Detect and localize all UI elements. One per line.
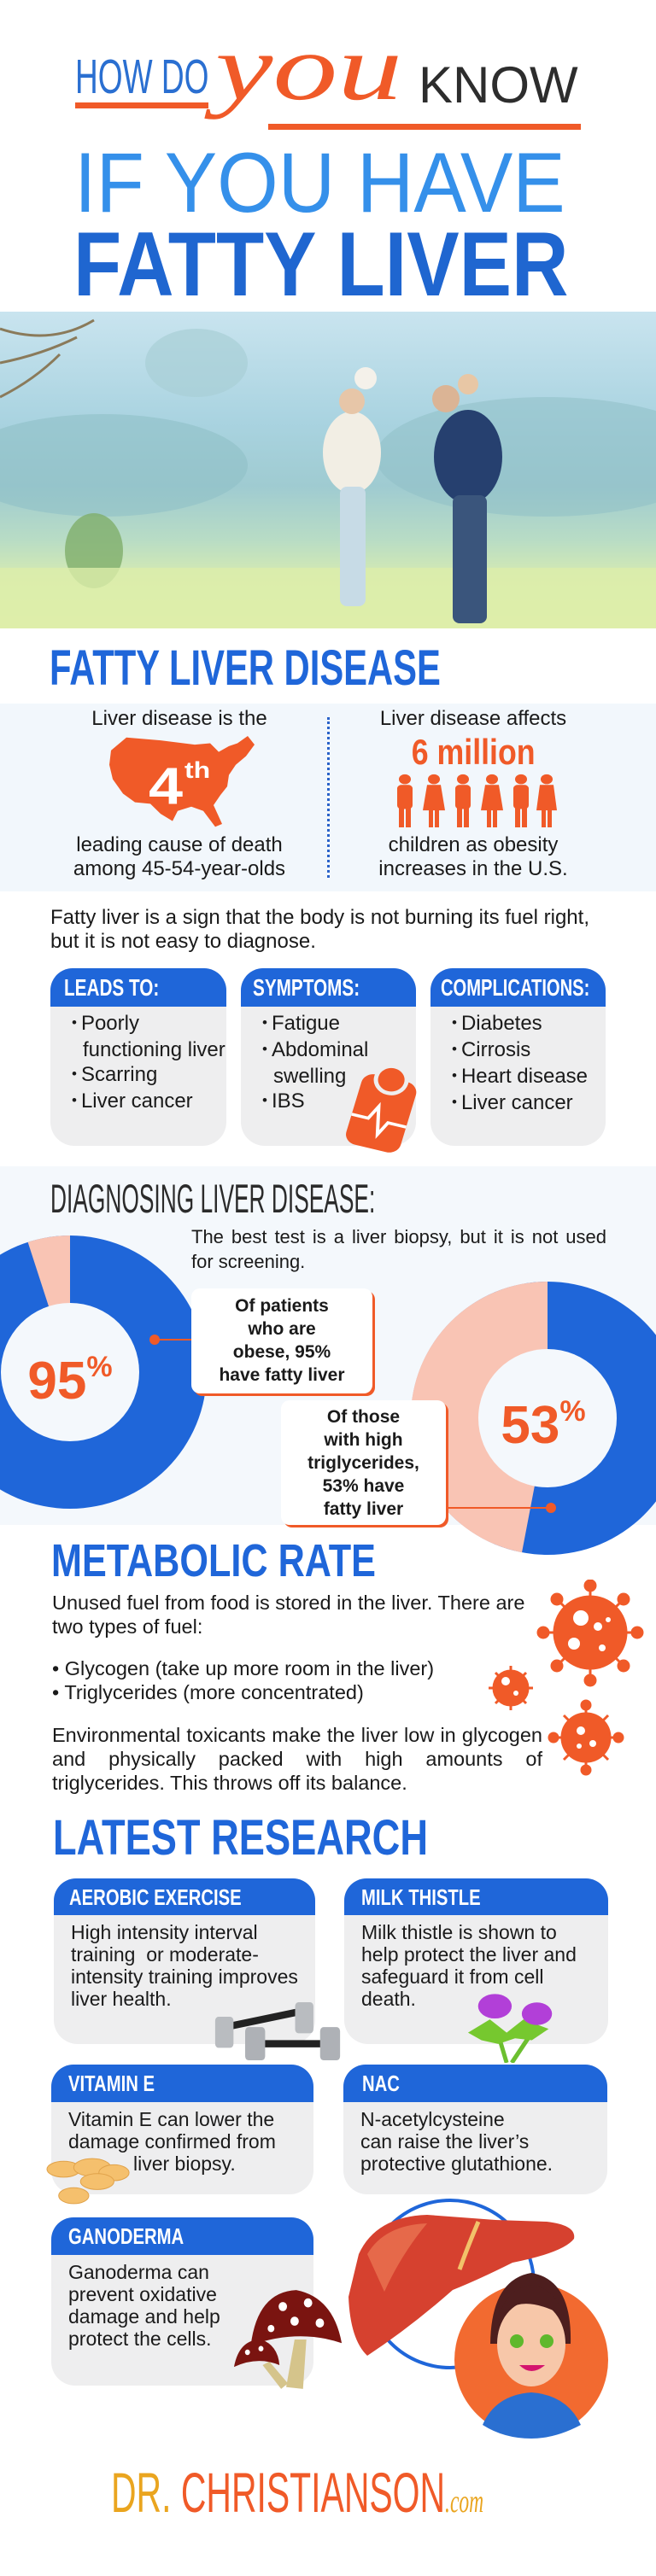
panel: complications: Heart disease bbox=[461, 1065, 588, 1088]
stat: 6 million children: children as obesity bbox=[389, 833, 558, 856]
panel: complications: Liver cancer bbox=[461, 1091, 573, 1114]
icon: vitamin capsules bbox=[46, 2158, 130, 2205]
title line 1: you bbox=[215, 15, 402, 120]
text: metabolic rate body: • Triglycerides (more concentrated) bbox=[52, 1681, 364, 1703]
icon: liver with woman bbox=[348, 2199, 608, 2439]
heading: diagnosing liver disease: DIAGNOSING LIVER DISEASE: bbox=[50, 1176, 375, 1221]
icon: patient monitor bbox=[346, 1067, 417, 1153]
text: metabolic rate body: Unused fuel from food is stored in the liver. There are two types of fuel: bbox=[52, 1592, 524, 1638]
callout: obese 95% bbox=[191, 1288, 372, 1393]
stat: 4th leading cause bbox=[73, 707, 285, 880]
panel: symptoms: SYMPTOMS: bbox=[253, 974, 360, 1001]
callout: triglycerides 53%: 53% have bbox=[323, 1476, 404, 1496]
title line 1: KNOW bbox=[419, 56, 578, 114]
stat: 4th leading cause: among 45-54-year-olds bbox=[73, 857, 285, 880]
callout: obese 95%: who are bbox=[248, 1319, 316, 1339]
panel: leads to: Poorly functioning liver bbox=[81, 1012, 226, 1061]
panel: symptoms bbox=[241, 968, 416, 1146]
chart: donut 95%: 95 bbox=[27, 1352, 86, 1411]
text: metabolic rate body: • Glycogen (take up more room in the liver) bbox=[52, 1657, 434, 1679]
panel: vitamin e: Vitamin E can lower the damage confirmed from liver biopsy. bbox=[68, 2108, 276, 2175]
title bbox=[73, 15, 581, 315]
panel: symptoms: Abdominal swelling bbox=[272, 1038, 368, 1088]
icon: dumbbells bbox=[215, 2002, 340, 2060]
callout: obese 95%: obese, 95% bbox=[233, 1342, 331, 1362]
text: metabolic rate body: Environmental toxicants make the liver low in glycogen and physically packed with high amounts of triglycerides. This throws off its balance. bbox=[52, 1724, 542, 1794]
icon: US map bbox=[109, 736, 255, 827]
panel: diagnosing background bbox=[0, 1166, 656, 1525]
callout: triglycerides 53%: fatty liver bbox=[324, 1499, 403, 1519]
panel: aerobic exercise: High intensity interval training or moderate-intensity training improves liver health. bbox=[71, 1921, 298, 2010]
icon: thistle flower bbox=[468, 1994, 552, 2063]
chart: donut 95% bbox=[0, 1235, 205, 1509]
title line 1 bbox=[75, 15, 581, 130]
icon: US map: th bbox=[184, 757, 210, 783]
panel: leads to: Liver cancer bbox=[81, 1089, 193, 1113]
stat: 4th leading cause: leading cause of death bbox=[76, 833, 283, 856]
panel: NAC bbox=[343, 2065, 607, 2194]
panel: symptoms: IBS bbox=[272, 1089, 305, 1113]
text: fatty liver intro: but it is not easy to diagnose. bbox=[50, 930, 316, 953]
panel: ganoderma: Ganoderma can prevent oxidative damage and help protect the cells. bbox=[68, 2261, 220, 2350]
chart: donut 53%: 53 bbox=[501, 1396, 559, 1455]
callout: obese 95%: Of patients bbox=[235, 1296, 329, 1316]
callout: triglycerides 53%: Of those bbox=[327, 1407, 400, 1427]
panel: ganoderma: GANODERMA bbox=[68, 2223, 184, 2249]
panel: NAC: N-acetylcysteine bbox=[360, 2108, 505, 2130]
text: metabolic rate body bbox=[52, 1592, 543, 1794]
title line 3: FATTY LIVER bbox=[73, 213, 568, 315]
heading: fatty liver disease: FATTY LIVER DISEASE bbox=[50, 640, 441, 696]
title line 1: HOW DO bbox=[75, 50, 208, 104]
panel: complications: COMPLICATIONS: bbox=[441, 974, 589, 1001]
panel: ganoderma bbox=[51, 2217, 313, 2386]
stat: 6 million children: 6 million bbox=[412, 732, 535, 772]
stat: 6 million children bbox=[378, 707, 568, 880]
icon: viruses bbox=[489, 1580, 644, 1776]
icon: mushrooms bbox=[234, 2290, 342, 2389]
heading: metabolic rate: METABOLIC RATE bbox=[51, 1535, 376, 1586]
woman bbox=[323, 412, 381, 494]
panel: symptoms: Fatigue bbox=[272, 1012, 340, 1035]
panel: aerobic exercise: AEROBIC EXERCISE bbox=[69, 1884, 242, 1910]
panel: milk thistle: MILK THISTLE bbox=[361, 1884, 481, 1910]
text: biopsy: The best test is a liver biopsy, but it is not used for screening. bbox=[191, 1226, 606, 1272]
callout: obese 95%: have fatty liver bbox=[219, 1365, 345, 1385]
panel: NAC: can raise the liver’s protective glutathione. bbox=[360, 2130, 553, 2175]
panel: complications bbox=[430, 968, 606, 1146]
text: fatty liver intro bbox=[50, 906, 589, 953]
callout: triglycerides 53%: triglycerides, bbox=[308, 1453, 419, 1473]
panel: leads to: Scarring bbox=[81, 1063, 157, 1086]
panel: complications: Diabetes bbox=[461, 1012, 542, 1035]
panel: vitamin e bbox=[51, 2065, 313, 2194]
icon: children bbox=[397, 774, 557, 827]
chart: donut 53% bbox=[412, 1282, 656, 1555]
panel: stats band bbox=[0, 704, 656, 891]
title line 2: IF YOU HAVE bbox=[74, 135, 565, 230]
panel: leads to: LEADS TO: bbox=[64, 974, 159, 1001]
panel: aerobic exercise bbox=[54, 1878, 315, 2044]
panel: vitamin e: VITAMIN E bbox=[68, 2071, 155, 2096]
chart: donut 53%: % bbox=[559, 1395, 586, 1428]
panel: NAC: NAC bbox=[362, 2071, 400, 2096]
panel: milk thistle: Milk thistle is shown to help protect the liver and safeguard it from cell death. bbox=[361, 1921, 577, 2010]
man bbox=[434, 410, 502, 504]
panel: leads to bbox=[50, 968, 226, 1146]
heading: latest research: LATEST RESEARCH bbox=[53, 1810, 428, 1866]
photo: family walking in meadow bbox=[0, 312, 656, 628]
text: fatty liver intro: Fatty liver is a sign that the body is not burning its fuel right, bbox=[50, 906, 589, 929]
callout: triglycerides 53%: with high bbox=[324, 1430, 403, 1450]
chart: donut 95%: % bbox=[86, 1351, 113, 1383]
panel: milk thistle bbox=[344, 1878, 608, 2044]
logo: Dr. Christianson: DR. CHRISTIANSON.com bbox=[111, 2461, 483, 2524]
stat: 6 million children: increases in the U.S. bbox=[378, 857, 568, 880]
stat: 4th leading cause: Liver disease is the bbox=[91, 707, 267, 730]
icon: US map: 4 bbox=[149, 758, 183, 815]
stat: 6 million children: Liver disease affects bbox=[380, 707, 566, 730]
callout: triglycerides 53% bbox=[281, 1400, 446, 1525]
panel: complications: Cirrosis bbox=[461, 1038, 530, 1061]
